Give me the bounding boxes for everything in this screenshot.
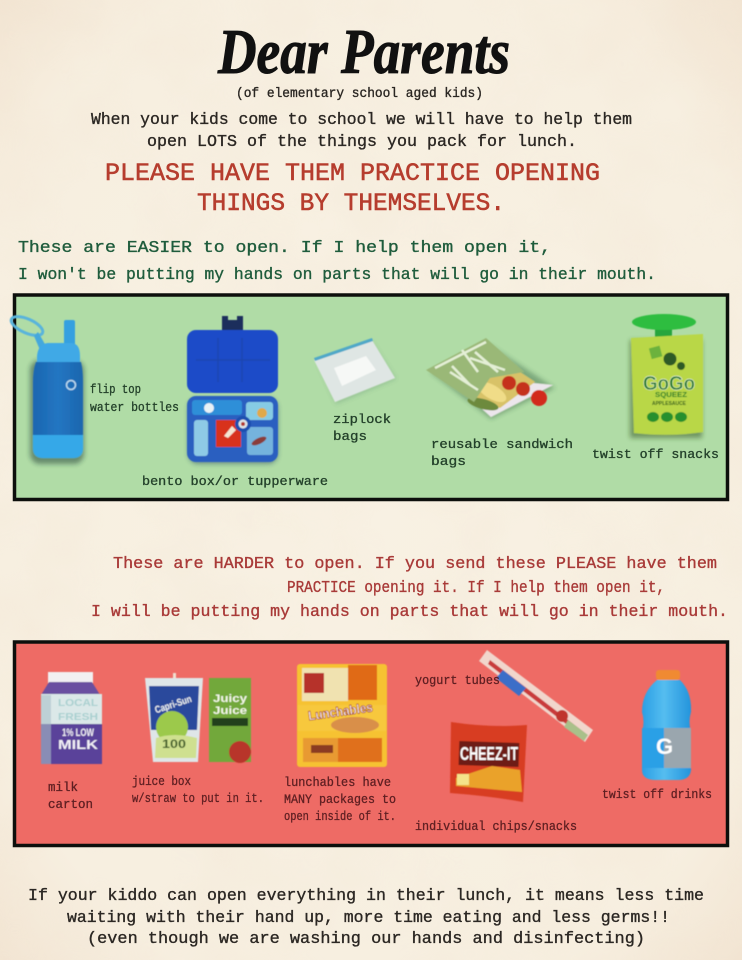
label: reusable sandwich bags: bags [431, 455, 466, 469]
red request heading: THINGS BY THEMSELVES. [197, 189, 505, 218]
icon: water bottle [9, 313, 84, 464]
easier intro text: I won't be putting my hands on parts that will go in their mouth. [18, 265, 656, 284]
icon: reusable sandwich bag [426, 338, 555, 419]
label: juice box: juice box [132, 775, 191, 789]
icon: sports drink bottle: G [656, 734, 673, 759]
icon: applesauce pouch: GoGo [643, 373, 695, 395]
closing message: If your kiddo can open everything in their lunch, it means less time [28, 886, 704, 905]
easier intro text: These are EASIER to open. If I help them open it, [18, 238, 551, 257]
label: bento box: bento box/or tupperware [142, 475, 328, 489]
label: twist off snacks: twist off snacks [592, 448, 719, 462]
label: reusable sandwich bags: reusable sandwich [431, 438, 573, 452]
label: milk carton [48, 781, 93, 812]
icon: juice box [209, 678, 251, 763]
icon: bento box [187, 316, 278, 464]
icon: milk carton: 1% LOW [62, 727, 94, 739]
subtitle: (of elementary school aged kids) [236, 87, 483, 102]
icon: juice box: Juice [213, 705, 247, 717]
intro text [91, 110, 632, 151]
icon: sports drink bottle [642, 670, 691, 780]
panel: easier to open [9, 295, 728, 500]
icon: applesauce pouch [630, 314, 703, 438]
icon: lunchables [297, 664, 387, 767]
label: flip top water bottles [90, 383, 179, 415]
icon: juice pouch: Capri-Sun [154, 694, 193, 716]
harder intro text: These are HARDER to open. If you send these PLEASE have them [113, 554, 717, 573]
panel: harder to open [14, 642, 728, 846]
label: individual chips: individual chips/snacks [415, 820, 577, 834]
icon: milk carton: LOCAL [58, 698, 98, 709]
label: flip top water bottles: flip top [90, 383, 141, 397]
harder intro text [91, 554, 728, 621]
label: reusable sandwich bags [431, 438, 573, 469]
label: lunchables: MANY packages to [284, 793, 396, 807]
harder intro text: PRACTICE opening it. If I help them open it, [287, 578, 665, 597]
label: ziplock bags [333, 413, 391, 444]
closing message: waiting with their hand up, more time eating and less germs!! [67, 908, 670, 927]
icon: ziplock bag [314, 338, 396, 404]
icon: juice box: Juicy [213, 693, 248, 705]
icon: cheez-it bag: CHEEZ-IT [460, 744, 518, 764]
icon: lunchables: Lunchables [307, 699, 374, 723]
label: lunchables [284, 776, 396, 824]
label: milk carton: milk [48, 781, 78, 795]
label: juice box [132, 775, 264, 806]
label: ziplock bags: bags [333, 430, 367, 444]
closing message: (even though we are washing our hands and disinfecting) [87, 929, 645, 948]
label: lunchables: open inside of it. [284, 810, 396, 824]
icon: applesauce pouch: APPLESAUCE [652, 401, 687, 407]
icon: milk carton: FRESH [58, 712, 98, 723]
icon: milk carton: MILK [58, 737, 99, 752]
easier intro text [18, 238, 656, 284]
label: milk carton: carton [48, 798, 93, 812]
icon: juice pouch [145, 673, 203, 762]
icon: yogurt tube [479, 650, 593, 742]
closing message [28, 886, 704, 948]
label: lunchables: lunchables have [284, 776, 391, 790]
label: yogurt tubes: yogurt tubes [415, 674, 500, 688]
icon: applesauce pouch: SQUEEZ [655, 392, 688, 399]
icon: cheez-it bag [450, 722, 527, 802]
icon: juice pouch: 100 [162, 737, 186, 751]
intro text: open LOTS of the things you pack for lunch. [147, 132, 577, 151]
red request heading: PLEASE HAVE THEM PRACTICE OPENING [105, 159, 600, 188]
label: juice box: w/straw to put in it. [132, 792, 264, 806]
label: flip top water bottles: water bottles [90, 401, 179, 415]
harder intro text: I will be putting my hands on parts that will go in their mouth. [91, 602, 728, 621]
label: ziplock bags: ziplock [333, 413, 391, 427]
label: twist off drinks: twist off drinks [602, 788, 712, 802]
title: Dear Parents [217, 16, 510, 87]
red request heading [105, 159, 600, 218]
intro text: When your kids come to school we will have to help them [91, 110, 632, 129]
icon: milk carton [41, 672, 102, 764]
